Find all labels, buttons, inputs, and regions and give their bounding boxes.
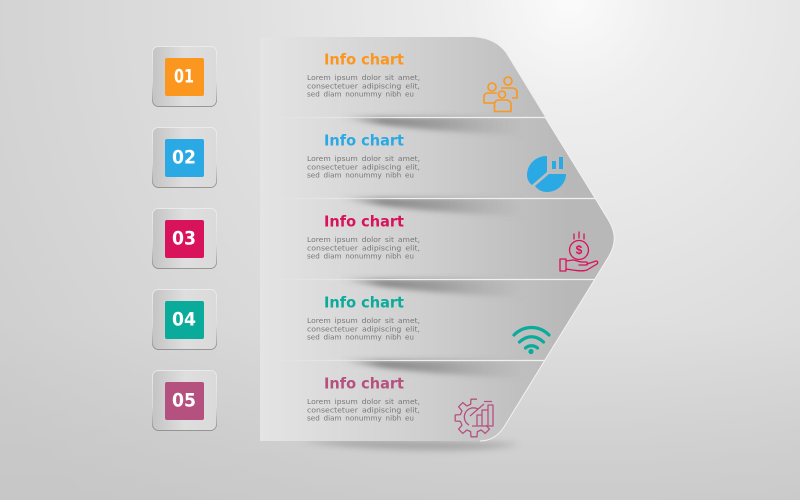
row 1 text xyxy=(307,50,420,98)
row 4 text: consectetuer adipiscing elit, xyxy=(307,324,420,334)
row 3 text: Info chart xyxy=(324,212,405,230)
row 1 text: sed diam nonummy nibh eu xyxy=(307,90,414,98)
badge 01 xyxy=(152,46,216,106)
badge 04: 04 xyxy=(172,308,196,330)
row 5 text: Info chart xyxy=(324,374,405,392)
badge 05: 05 xyxy=(172,390,196,412)
row 2 text: Lorem ipsum dolor sit amet, xyxy=(307,154,420,163)
icon: pie chart xyxy=(527,156,566,192)
row 4 text: Lorem ipsum dolor sit amet, xyxy=(307,316,420,325)
row 2 text xyxy=(307,132,420,180)
row 3 text: sed diam nonummy nibh eu xyxy=(307,252,414,260)
row 2 text: Info chart xyxy=(324,132,405,150)
row 2 text: consectetuer adipiscing elit, xyxy=(307,162,420,172)
row 5 text: sed diam nonummy nibh eu xyxy=(307,414,414,422)
icon: wifi xyxy=(514,328,549,354)
row 5 text xyxy=(307,374,420,422)
icon: people xyxy=(484,77,517,112)
badge 05 xyxy=(152,370,216,430)
badge 04 xyxy=(152,290,216,350)
row 1 text: Lorem ipsum dolor sit amet, xyxy=(307,73,420,82)
row 1 text: Info chart xyxy=(324,50,405,68)
row 1 text: consectetuer adipiscing elit, xyxy=(307,82,420,90)
row 5 text: consectetuer adipiscing elit, xyxy=(307,406,420,414)
row 4 text: sed diam nonummy nibh eu xyxy=(307,332,414,342)
row 3 text: consectetuer adipiscing elit, xyxy=(307,244,420,252)
row 2 text: sed diam nonummy nibh eu xyxy=(307,170,414,180)
badge 01: 01 xyxy=(174,66,194,88)
panel: number badges xyxy=(152,46,216,430)
icon: gear with bars xyxy=(455,399,493,437)
icon: hand with coin xyxy=(560,232,598,271)
row 3 text xyxy=(307,212,420,260)
row 4 text xyxy=(307,294,420,342)
badge 03: 03 xyxy=(172,228,196,250)
badge 02 xyxy=(152,128,216,188)
shadow under arrow xyxy=(300,440,520,450)
icon: hand with coin: $ xyxy=(576,243,583,257)
row 3 text: Lorem ipsum dolor sit amet, xyxy=(307,235,420,244)
row 4 text: Info chart xyxy=(324,294,405,312)
badge 03 xyxy=(152,208,216,268)
panel: arrow xyxy=(260,37,614,441)
row 5 text: Lorem ipsum dolor sit amet, xyxy=(307,397,420,406)
badge 02: 02 xyxy=(172,146,196,168)
